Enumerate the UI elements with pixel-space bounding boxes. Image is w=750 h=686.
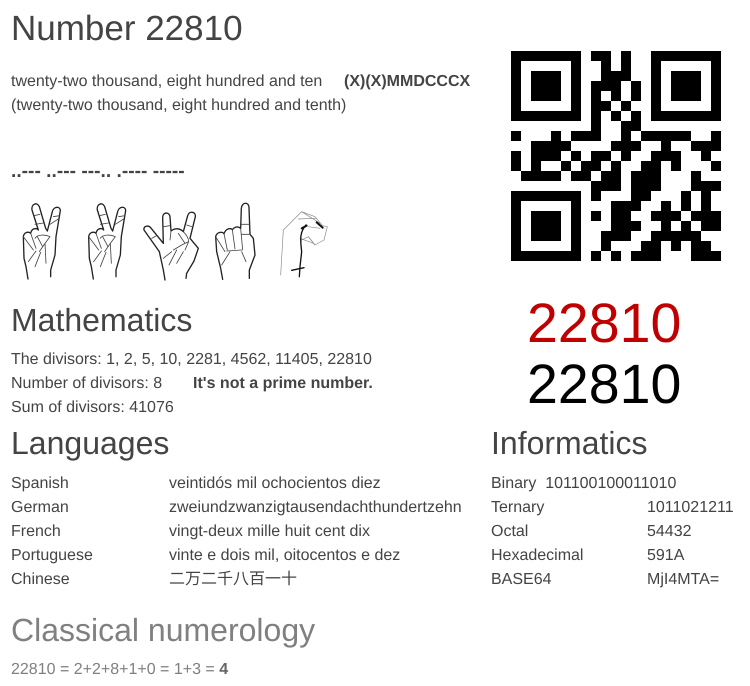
icon: hand digit 2 <box>89 204 126 279</box>
prime status: It's not a prime number. <box>193 375 373 392</box>
roman numeral: (X)(X)MMDCCCX <box>344 73 470 90</box>
heading: informatics: Informatics <box>491 425 647 461</box>
spanish value: veintidós mil ochocientos diez <box>169 475 381 492</box>
morse code: ..--- ..--- ---.. .---- ----- <box>11 161 185 182</box>
sum of divisors: Sum of divisors: 41076 <box>11 399 174 416</box>
panel: informatics <box>491 475 734 588</box>
german value: zweiundzwanzigtausendachthundertzehn <box>169 499 462 516</box>
icon: QR code <box>511 51 721 261</box>
heading: mathematics: Mathematics <box>11 302 192 338</box>
spanish: Spanish <box>11 475 69 492</box>
chinese value: 二万二千八百一十 <box>169 571 297 588</box>
panel: languages <box>11 475 462 588</box>
hexadecimal: Hexadecimal <box>491 547 583 564</box>
portuguese value: vinte e dois mil, oitocentos e dez <box>169 547 400 564</box>
cardinal name: twenty-two thousand, eight hundred and ten <box>11 73 322 90</box>
portuguese: Portuguese <box>11 547 93 564</box>
title: Number 22810 <box>11 9 243 48</box>
number in black: 22810 <box>527 353 681 415</box>
binary: Binary 101100100011010 <box>491 475 676 492</box>
icon: hand digit 0 <box>281 212 327 277</box>
ordinal name: (twenty-two thousand, eight hundred and tenth) <box>11 97 346 114</box>
heading: classical numerology: Classical numerology <box>11 612 315 648</box>
number in red: 22810 <box>527 292 681 354</box>
octal: Octal <box>491 523 528 540</box>
divisors list: The divisors: 1, 2, 5, 10, 2281, 4562, 11405, 22810 <box>11 351 372 368</box>
base64: BASE64 <box>491 571 551 588</box>
numerology sum: 22810 = 2+2+8+1+0 = 1+3 = 4 <box>11 661 228 678</box>
french value: vingt-deux mille huit cent dix <box>169 523 370 540</box>
heading: languages: Languages <box>11 425 169 461</box>
icon: sign language hands <box>22 202 328 281</box>
hexadecimal value: 591A <box>647 547 684 564</box>
chinese: Chinese <box>11 571 70 588</box>
number of divisors: Number of divisors: 8 <box>11 375 162 392</box>
french: French <box>11 523 61 540</box>
icon: hand digit 2 <box>23 204 60 279</box>
base64 value: MjI4MTA= <box>647 571 719 588</box>
german: German <box>11 499 69 516</box>
ternary: Ternary <box>491 499 544 516</box>
octal value: 54432 <box>647 523 692 540</box>
icon: hand digit 1 <box>216 203 255 279</box>
ternary value: 1011021211 <box>647 499 734 516</box>
icon: hand digit 8 <box>144 212 198 280</box>
